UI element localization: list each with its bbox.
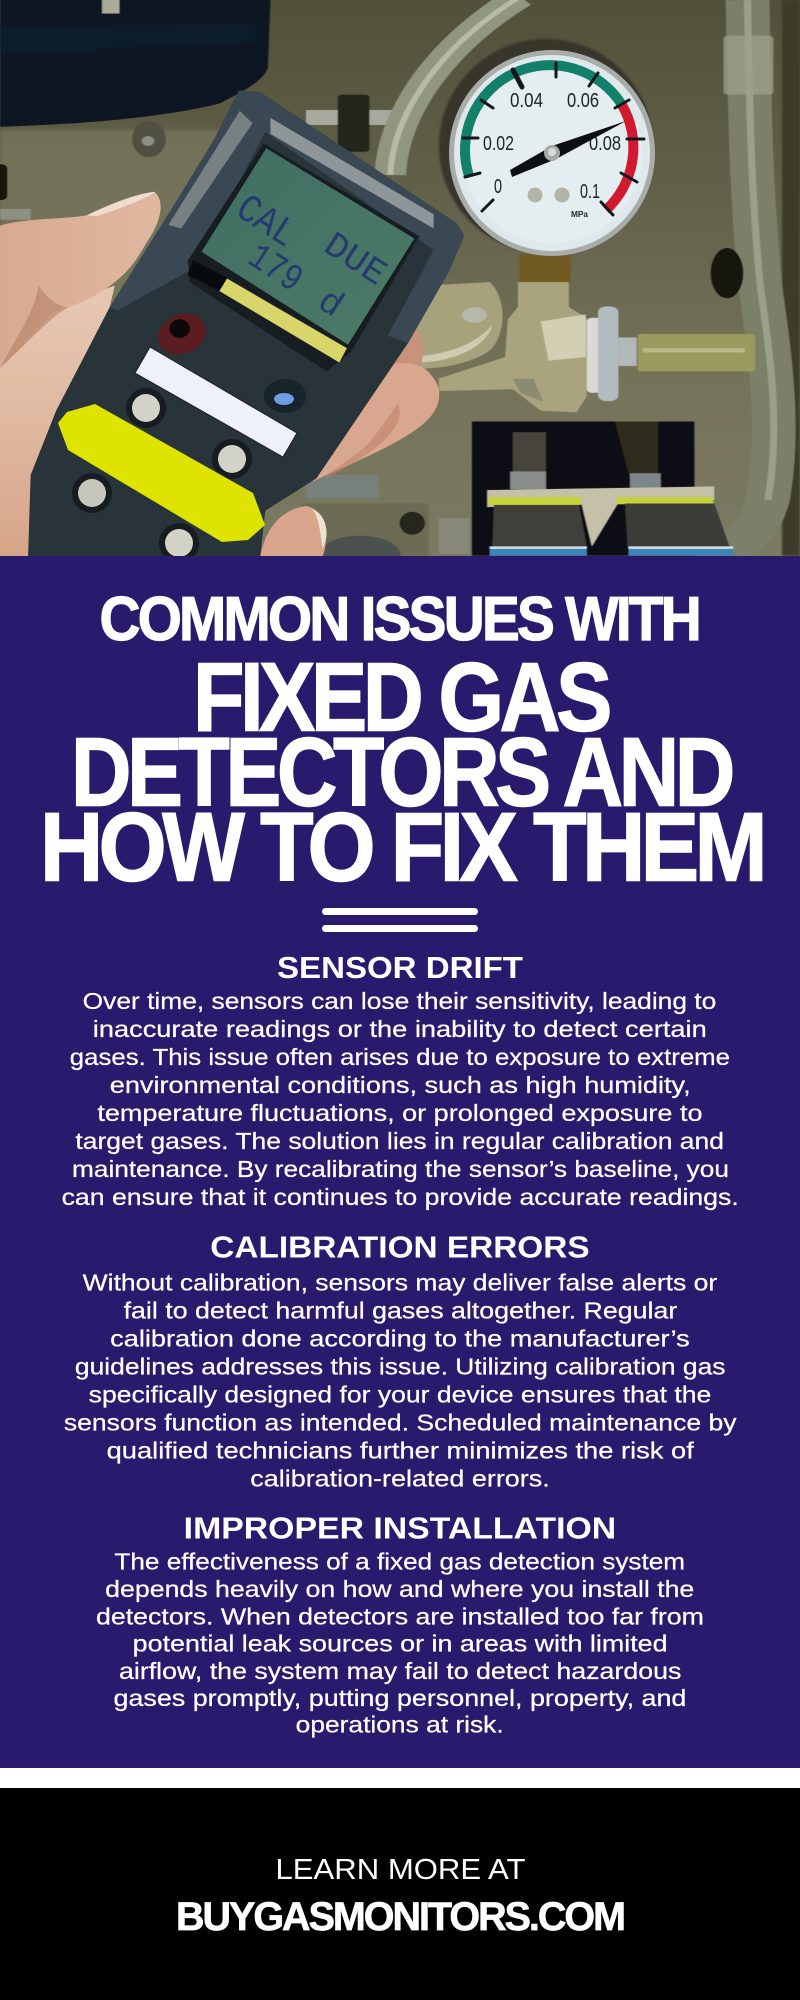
LCD text: CAL — [227, 187, 303, 259]
screw on wall — [132, 121, 166, 157]
finger crease shadow — [0, 286, 69, 368]
text: improper installation body: operations at risk. — [296, 1712, 504, 1738]
transparent right tube — [730, 0, 774, 546]
heading: sensor drift: SENSOR DRIFT — [277, 951, 523, 985]
gauge ticks — [463, 63, 644, 215]
photo: handheld gas detector in front of pressure gauge — [0, 0, 800, 575]
red gauge arc — [606, 105, 633, 210]
gauge scale numbers: 0.1 — [580, 181, 600, 203]
footer call to action: LEARN MORE AT — [276, 1854, 526, 1886]
brass gauge stem — [519, 254, 570, 284]
text: calibration errors body: specifically designed for your device ensures that the — [89, 1382, 711, 1408]
metallic top edge highlight — [270, 118, 434, 229]
purple content panel — [0, 556, 800, 1768]
background equipment — [0, 0, 774, 575]
LCD text: 179 — [239, 236, 310, 303]
lower thumb tip — [260, 506, 326, 557]
dark recess — [472, 421, 694, 556]
dark screen corner — [188, 260, 228, 291]
round grey buttons — [72, 388, 252, 563]
gauge scale numbers — [483, 90, 621, 219]
LCD screen — [202, 148, 414, 345]
title: COMMON ISSUES WITH — [100, 585, 699, 654]
section: sensor drift — [62, 951, 739, 1210]
gauge scale numbers: MPa — [571, 210, 589, 219]
gauge scale numbers: 0 — [494, 176, 502, 198]
LCD text: d — [310, 281, 350, 327]
text: improper installation body: gases promptly, putting personnel, property, and — [114, 1685, 686, 1711]
black housing top left — [0, 0, 270, 127]
heading: improper installation: IMPROPER INSTALLATION — [184, 1511, 616, 1545]
footer call to action: BUYGASMONITORS.COM — [176, 1895, 624, 1939]
text: sensor drift body: target gases. The solution lies in regular calibration and — [75, 1128, 724, 1154]
gauge scale numbers: 0.04 — [510, 90, 543, 112]
text: calibration errors body: guidelines addresses this issue. Utilizing calibration gas — [75, 1354, 725, 1380]
section: calibration errors — [64, 1230, 737, 1492]
text: sensor drift body — [62, 988, 739, 1210]
title: FIXED GAS — [193, 643, 609, 752]
text: improper installation body: detectors. When detectors are installed too far from — [96, 1603, 704, 1629]
screen surround — [188, 144, 419, 371]
text: improper installation body: airflow, the system may fail to detect hazardous — [119, 1658, 681, 1684]
text: calibration errors body: fail to detect harmful gases altogether. Regular — [124, 1298, 677, 1324]
text: sensor drift body: can ensure that it continues to provide accurate readings. — [62, 1184, 739, 1210]
text: sensor drift body: temperature fluctuations, or prolonged exposure to — [97, 1100, 702, 1126]
terminal blocks — [487, 486, 714, 546]
text: calibration errors body: calibration-related errors. — [250, 1466, 550, 1492]
heading: calibration errors: CALIBRATION ERRORS — [210, 1230, 590, 1264]
text: improper installation body: The effectiveness of a fixed gas detection system — [114, 1548, 685, 1574]
transparent curved tube — [390, 0, 520, 175]
double-line divider — [322, 908, 478, 932]
bright yellow label — [58, 404, 265, 542]
device body — [27, 90, 464, 557]
text: calibration errors body: sensors function as intended. Scheduled maintenance by — [64, 1410, 737, 1436]
text: calibration errors body — [64, 1269, 737, 1492]
white and grey flange — [587, 318, 601, 393]
text: improper installation body: potential leak sources or in areas with limited — [133, 1631, 668, 1657]
white label — [135, 347, 297, 457]
text: improper installation body: depends heavily on how and where you install the — [105, 1576, 694, 1602]
blue button — [264, 379, 306, 413]
text: improper installation body — [96, 1548, 704, 1738]
text: sensor drift body: inaccurate readings or the inability to detect certain — [93, 1016, 707, 1042]
thumb finger holding device — [0, 193, 161, 368]
text: sensor drift body: gases. This issue often arises due to exposure to extreme — [70, 1044, 730, 1070]
palm — [0, 286, 115, 557]
green gauge arc — [465, 65, 622, 176]
hand in front of device — [0, 192, 327, 557]
text: calibration errors body: Without calibration, sensors may deliver false alerts or — [83, 1269, 717, 1295]
text: sensor drift body: maintenance. By recalibrating the sensor’s baseline, you — [72, 1156, 729, 1182]
text: calibration errors body: qualified technicians further minimizes the risk of — [107, 1438, 694, 1464]
LCD text — [239, 196, 388, 316]
beige valve body — [439, 282, 587, 412]
gas detector device — [27, 90, 464, 557]
gauge scale numbers: 0.08 — [589, 133, 621, 155]
text: calibration errors body: calibration done according to the manufacturer’s — [110, 1326, 690, 1352]
valve disc — [398, 282, 503, 369]
gauge scale numbers: 0.02 — [483, 133, 514, 155]
red sensor window — [158, 314, 206, 354]
gauge screws — [528, 188, 542, 202]
fingernail — [87, 192, 156, 216]
yellow-tinted tube connector — [638, 334, 755, 371]
hand fingers behind device — [311, 318, 439, 482]
title — [40, 585, 763, 902]
metal rod and post — [306, 110, 398, 125]
text: sensor drift body: environmental conditions, such as high humidity, — [110, 1072, 691, 1098]
pressure gauge — [439, 39, 655, 256]
black footer band — [0, 1788, 800, 2000]
gauge needle — [510, 121, 626, 177]
dark wall hole — [711, 248, 743, 298]
footer call to action — [176, 1854, 624, 1939]
text: sensor drift body: Over time, sensors can lose their sensitivity, leading to — [83, 988, 716, 1014]
LCD text: DUE — [316, 225, 394, 295]
section: improper installation — [96, 1511, 704, 1738]
photo wall background — [0, 0, 800, 556]
gauge scale numbers: 0.06 — [567, 90, 599, 112]
pale yellow sticker — [219, 279, 347, 362]
small plate, dial and knob lower centre — [306, 475, 379, 498]
